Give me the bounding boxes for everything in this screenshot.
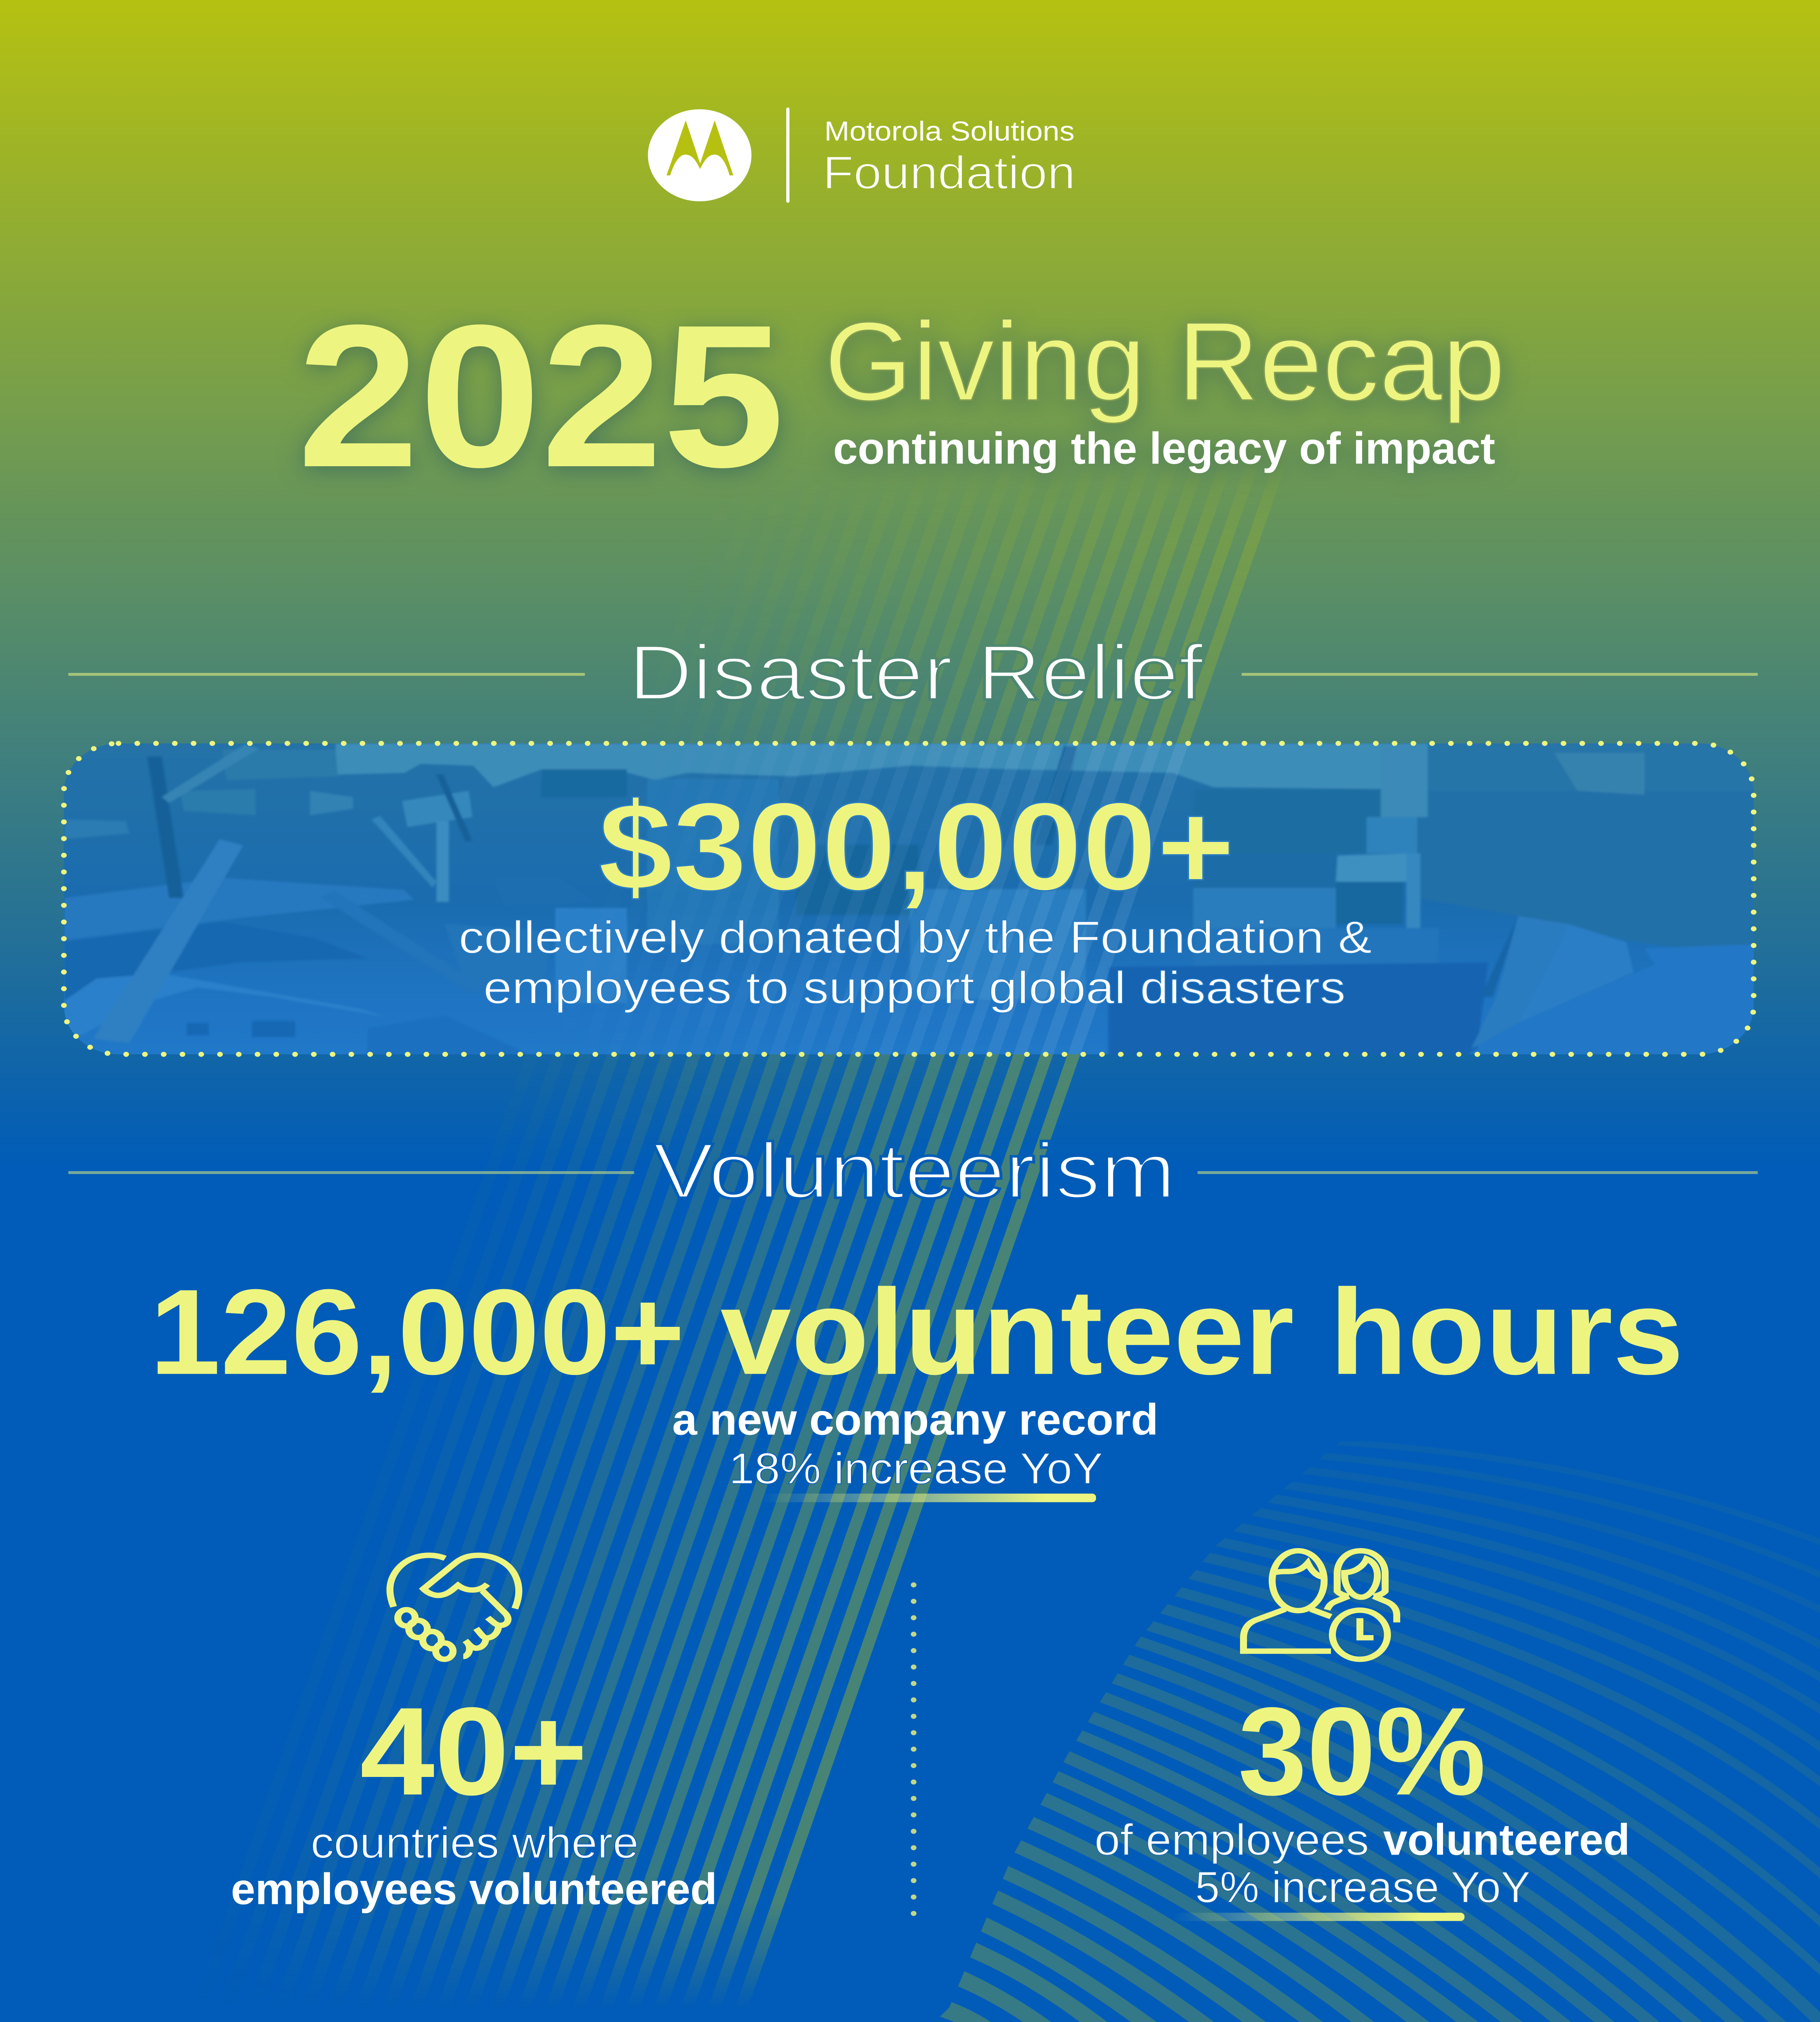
section heading: Disaster Relief: Disaster Relief	[629, 628, 1204, 716]
record note	[672, 1396, 1158, 1502]
stripes showing through the photo	[199, 449, 1285, 2009]
logo: Motorola Solutions Foundation	[648, 108, 1075, 203]
record note: 18% increase YoY	[729, 1445, 1103, 1493]
title: Giving Recap: Giving Recap	[824, 298, 1505, 425]
icon: heart handshake	[390, 1555, 519, 1659]
photo: disaster debris, blue duotone	[64, 743, 1754, 1055]
description: collectively donated by the Foundation &	[459, 912, 1372, 963]
logo divider	[786, 108, 789, 203]
title block	[297, 283, 1505, 510]
logo wordmark: Motorola Solutions	[824, 116, 1075, 147]
underline accent	[760, 1493, 1096, 1502]
countries description: countries where	[311, 1819, 639, 1867]
employees description: 5% increase YoY	[1195, 1863, 1530, 1912]
diagonal stripe beam	[283, 493, 1276, 1997]
stat: 40+: 40+	[360, 1681, 588, 1821]
dotted border	[64, 743, 1754, 1054]
section heading: Volunteerism: Volunteerism	[653, 1127, 1176, 1214]
description	[459, 912, 1372, 1013]
curved stripe pattern bottom right	[929, 1438, 1820, 2022]
record note: a new company record	[672, 1396, 1158, 1444]
stat: 126,000+ volunteer hours: 126,000+ volunteer hours	[150, 1264, 1684, 1400]
stat: 30%: 30%	[1238, 1681, 1486, 1821]
section heading: Volunteerism	[68, 1127, 1758, 1214]
employees description: volunteered	[1383, 1816, 1630, 1864]
description: employees to support global disasters	[483, 962, 1346, 1013]
underline accent	[1173, 1913, 1464, 1921]
employees description	[1094, 1816, 1630, 1921]
logo wordmark	[823, 116, 1075, 199]
employees description: of employees	[1094, 1816, 1369, 1864]
logo wordmark: Foundation	[823, 147, 1075, 199]
background gradient	[0, 0, 1820, 1168]
vertical dotted divider	[911, 1585, 916, 1916]
countries description	[231, 1819, 717, 1914]
subtitle: continuing the legacy of impact	[833, 423, 1495, 473]
panel: disaster relief photo box	[61, 741, 1757, 1057]
section heading: Disaster Relief	[68, 628, 1758, 716]
icon: two people with clock	[1244, 1551, 1397, 1659]
icon: Motorola M emblem	[648, 109, 751, 201]
countries description: employees volunteered	[231, 1865, 717, 1914]
title: 2025: 2025	[297, 283, 785, 510]
stat: $300,000+: $300,000+	[598, 776, 1235, 916]
